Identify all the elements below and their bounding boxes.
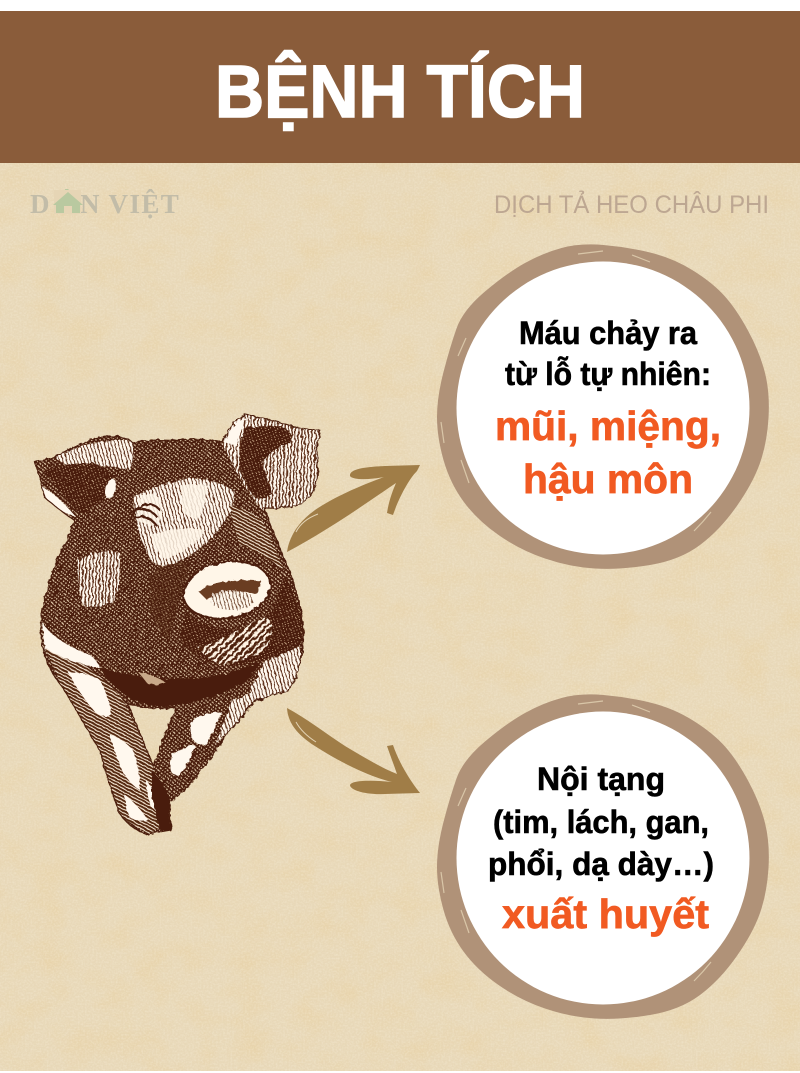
illustration: pig	[30, 410, 325, 840]
subtitle: DỊCH TẢ HEO CHÂU PHI	[494, 189, 769, 219]
brush ring	[437, 244, 769, 569]
header band	[0, 11, 800, 163]
highlight text: xuất huyết	[502, 891, 709, 937]
body text: từ lỗ tự nhiên:	[505, 356, 711, 392]
brush ring	[437, 694, 769, 1019]
logo: Dan Viet: D	[30, 189, 50, 219]
white disc	[456, 712, 750, 1004]
panel: bleeding from natural openings	[437, 244, 769, 569]
body text: Máu chảy ra	[519, 315, 697, 351]
arrow: to upper circle	[287, 465, 420, 552]
highlight text: hậu môn	[523, 456, 693, 502]
title: BỆNH TÍCH	[215, 50, 585, 133]
highlight text: mũi, miệng,	[495, 403, 721, 449]
logo: Dan Viet: N VIỆT	[80, 189, 180, 219]
white disc	[456, 262, 750, 554]
body text: Nội tạng	[537, 761, 665, 797]
logo: Dan Viet	[30, 189, 180, 219]
logo: Dan Viet: Â	[57, 189, 77, 219]
arrow: to lower circle	[287, 708, 420, 794]
body text: (tim, lách, gan,	[493, 804, 709, 840]
panel: internal organ hemorrhage	[437, 694, 769, 1019]
body text: phổi, dạ dày…)	[488, 846, 714, 882]
